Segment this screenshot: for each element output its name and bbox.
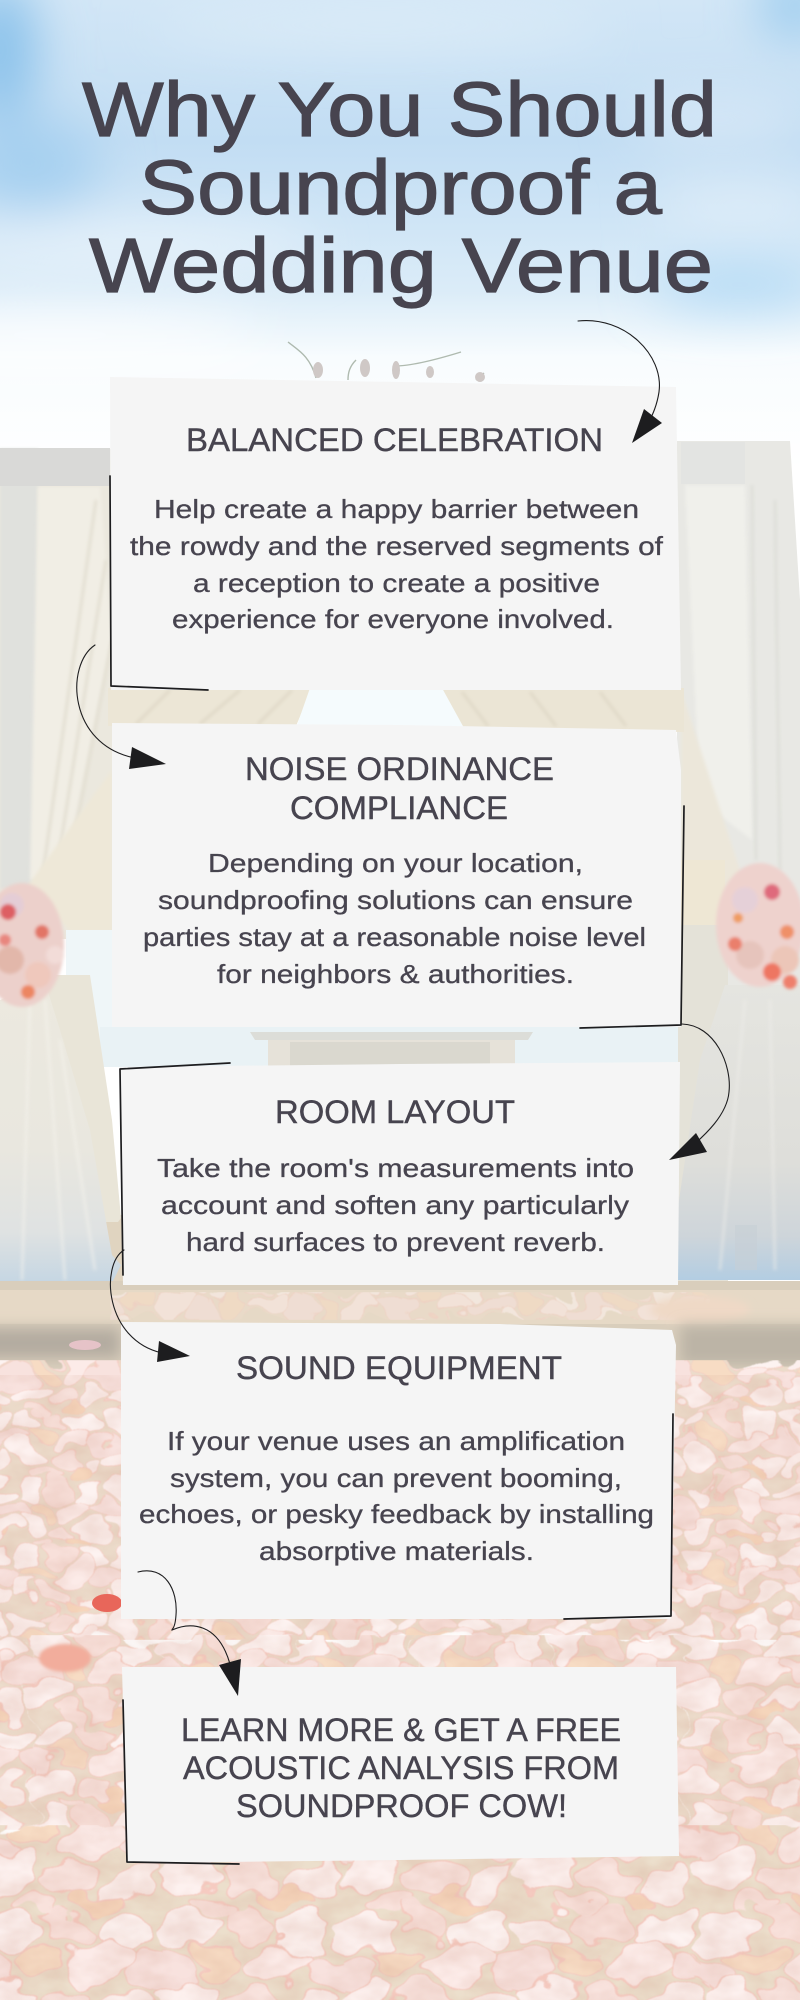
heading: call to action xyxy=(181,1712,621,1824)
text block: balanced celebration: experience for everyone involved. xyxy=(172,604,614,634)
background photo: foliage above arch xyxy=(288,342,485,382)
panel: sound equipment xyxy=(121,1322,676,1619)
text block: sound equipment: echoes, or pesky feedback by installing xyxy=(139,1499,654,1529)
title: Why You Should xyxy=(82,67,717,153)
text block: balanced celebration: a reception to create a positive xyxy=(193,568,600,598)
background photo: upper left curtain xyxy=(0,448,112,939)
background photo: upper right curtain xyxy=(677,441,800,1000)
text block: noise ordinance compliance: Depending on your location, xyxy=(208,848,583,878)
heading: noise ordinance compliance: COMPLIANCE xyxy=(290,790,508,826)
panel: room layout xyxy=(120,1062,680,1285)
text block: sound equipment xyxy=(139,1426,654,1566)
title: Wedding Venue xyxy=(89,223,713,309)
arrow: third panel to fourth panel xyxy=(110,1250,190,1362)
text block: room layout: Take the room's measurements into xyxy=(157,1153,634,1183)
sketch corner: room layout xyxy=(120,1063,230,1275)
heading: balanced celebration: BALANCED CELEBRATION xyxy=(186,422,603,458)
icon: right flower tie-back xyxy=(716,863,800,989)
arrow: first panel to second panel xyxy=(77,645,166,769)
background photo: swag curtains between panels xyxy=(108,688,684,732)
text block: sound equipment: system, you can prevent booming, xyxy=(170,1463,622,1493)
heading: noise ordinance compliance: NOISE ORDINANCE xyxy=(245,751,554,787)
background photo: lower curtains xyxy=(0,925,800,1287)
heading: room layout: ROOM LAYOUT xyxy=(275,1094,515,1130)
heading: call to action: LEARN MORE & GET A FREE xyxy=(181,1712,621,1748)
heading: call to action: ACOUSTIC ANALYSIS FROM xyxy=(183,1750,619,1786)
text block: sound equipment: absorptive materials. xyxy=(259,1536,534,1566)
title xyxy=(82,67,717,309)
background photo: ceremony gap and table xyxy=(66,930,684,1290)
sketch corner: balanced celebration xyxy=(110,476,208,690)
sketch corner: noise ordinance xyxy=(580,806,684,1028)
text block: sound equipment: If your venue uses an amplification xyxy=(167,1426,625,1456)
arrow: fourth panel to call to action xyxy=(138,1571,241,1696)
panel: noise ordinance compliance xyxy=(112,723,681,1027)
text block: noise ordinance compliance: parties stay at a reasonable noise level xyxy=(143,922,646,952)
panel: call to action xyxy=(122,1667,679,1863)
background photo: sand and petals xyxy=(0,1281,800,2000)
text block: balanced celebration: the rowdy and the reserved segments of xyxy=(130,531,664,561)
icon: left flower tie-back xyxy=(0,883,64,1007)
sketch corner: sound equipment xyxy=(564,1414,673,1619)
text block: room layout xyxy=(157,1153,634,1257)
heading: sound equipment: SOUND EQUIPMENT xyxy=(236,1350,562,1386)
text block: room layout: hard surfaces to prevent reverb. xyxy=(186,1227,605,1257)
title: Soundproof a xyxy=(139,145,662,231)
arrow: second panel to third panel xyxy=(669,1024,729,1160)
arrow: title to first panel xyxy=(578,321,662,443)
background photo: sky xyxy=(0,0,800,470)
text block: noise ordinance compliance xyxy=(143,848,646,989)
text block: noise ordinance compliance: soundproofing solutions can ensure xyxy=(158,885,633,915)
heading: call to action: SOUNDPROOF COW! xyxy=(236,1788,567,1824)
heading: noise ordinance compliance xyxy=(245,751,554,826)
text block: balanced celebration xyxy=(130,494,664,634)
sketch corner: call to action xyxy=(123,1700,239,1864)
text block: room layout: account and soften any particularly xyxy=(161,1190,629,1220)
panel: balanced celebration xyxy=(110,377,681,690)
text block: noise ordinance compliance: for neighbors & authorities. xyxy=(217,959,574,989)
text block: balanced celebration: Help create a happy barrier between xyxy=(154,494,639,524)
